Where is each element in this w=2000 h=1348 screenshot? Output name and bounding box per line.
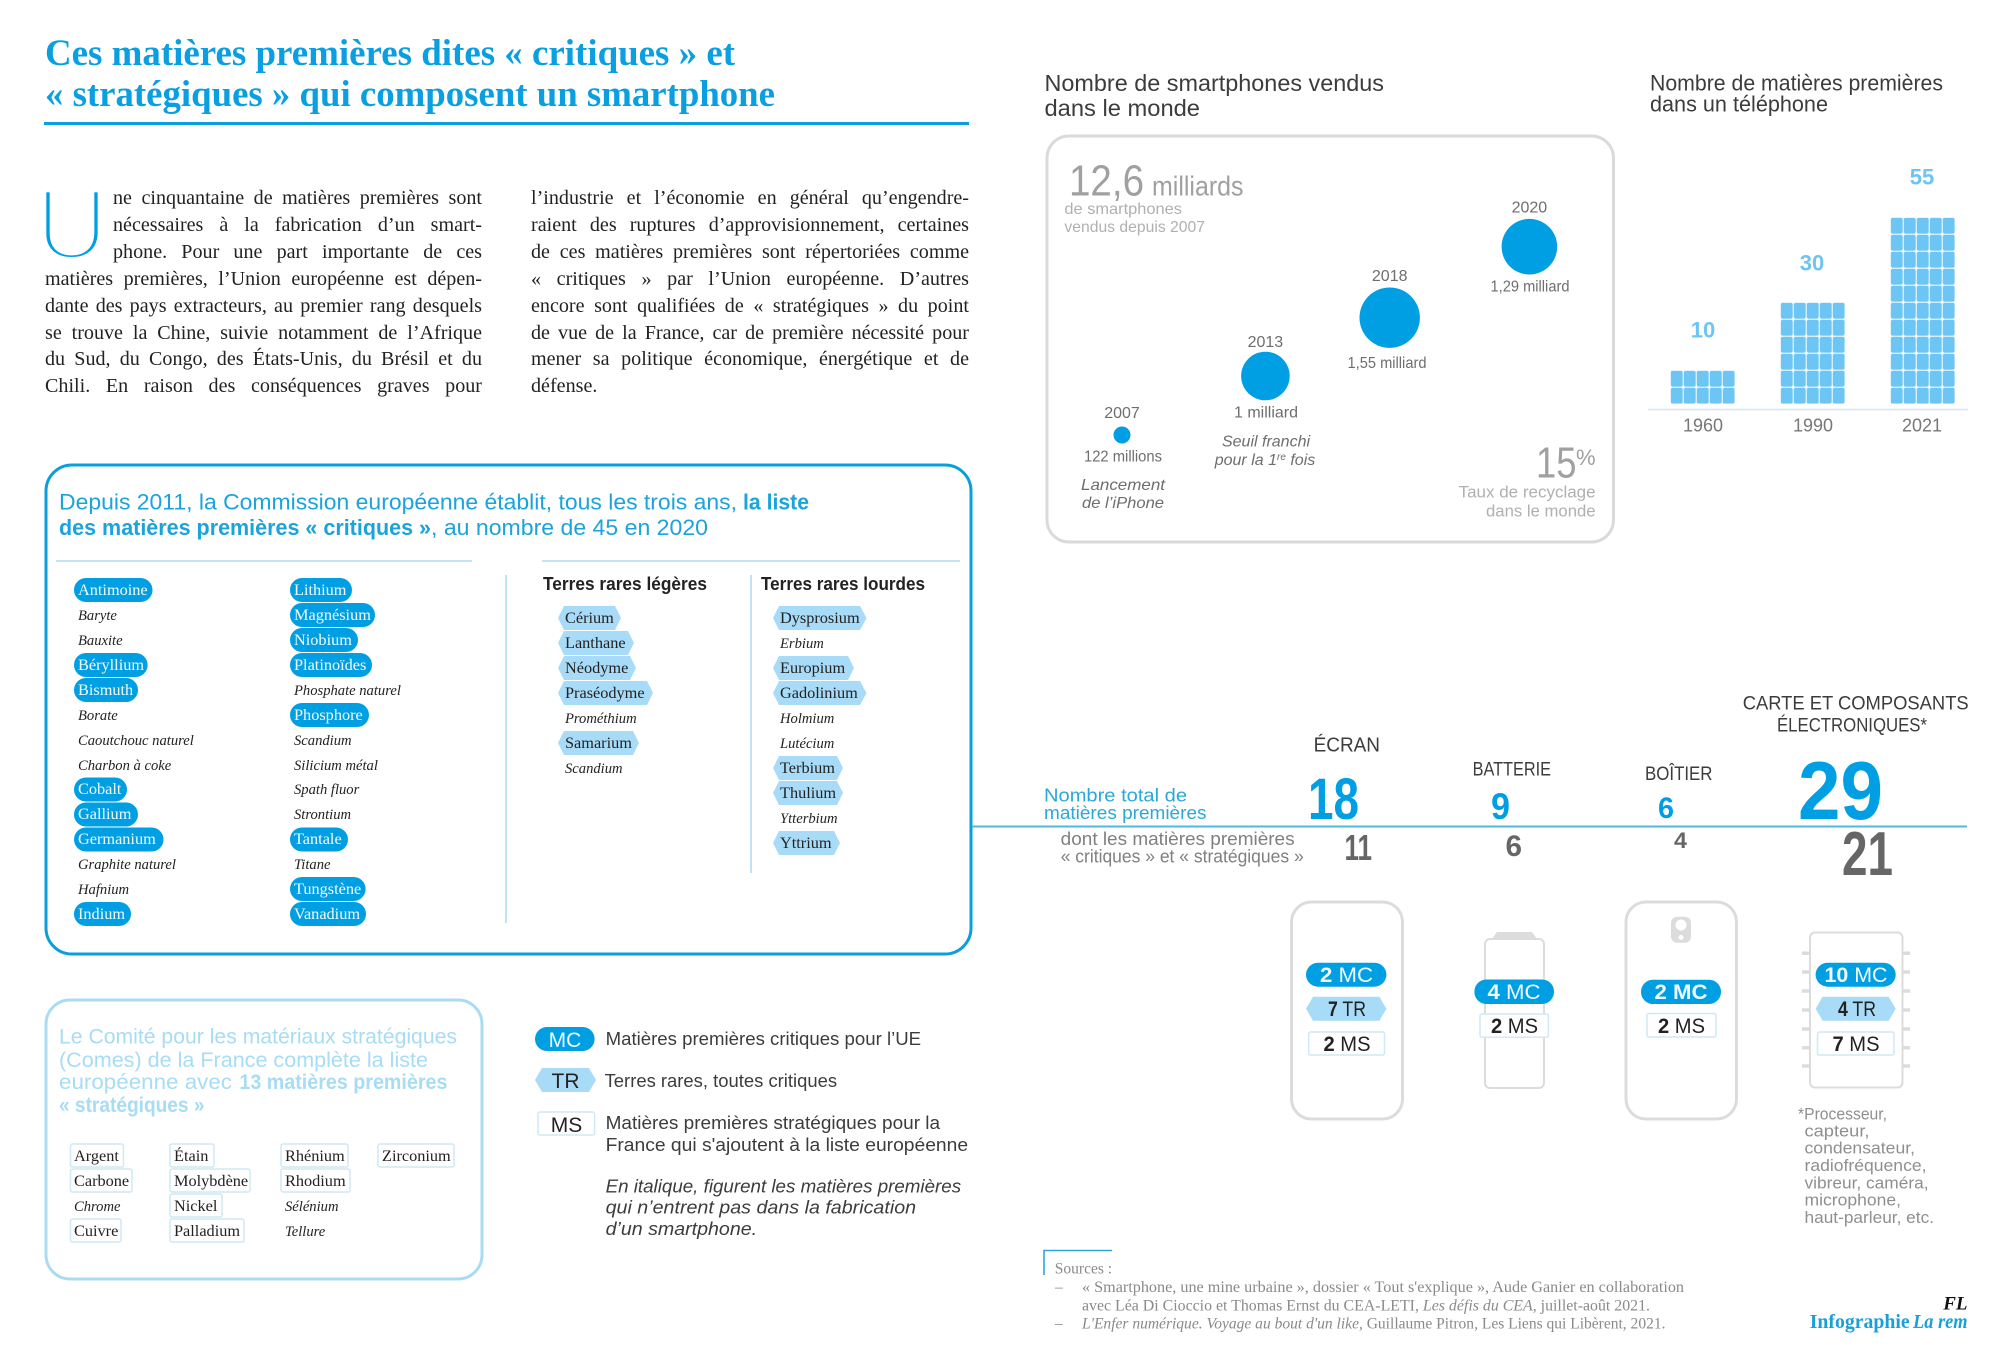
bubble 2013: 2013 — [1248, 334, 1283, 351]
legend: MC: MC — [549, 1029, 581, 1052]
credit: La rem — [1912, 1311, 1968, 1333]
bubble 2007: de l’iPhone — [1082, 495, 1164, 512]
panel heading: des matières premières « critiques » — [59, 515, 431, 540]
text block: intro column 2: encore sont qualifiées de « stratégiques » du point — [531, 295, 969, 317]
component: battery: 6 — [1506, 830, 1522, 863]
text block: intro column 2: raient des ruptures d’approvisionnement, certaines — [531, 214, 969, 236]
component: case — [1626, 763, 1736, 1119]
list column 1: Caoutchouc naturel — [78, 733, 194, 749]
strategic list: Tellure — [285, 1224, 326, 1240]
badge: 2 MC: 2 MC — [1320, 964, 1373, 987]
panel heading: Depuis 2011, la Commission européenne établit, tous les trois ans, — [59, 490, 737, 514]
bubble 2007: Lancement — [1081, 477, 1166, 494]
badge: 2 MS: 2 MS — [1658, 1015, 1705, 1038]
list column 2: Titane — [294, 857, 331, 873]
panel heading — [59, 490, 809, 540]
text block: intro column 2: de ces matières premières sont répertoriées comme — [531, 241, 969, 263]
list column 1: Borate — [78, 708, 118, 724]
legend: italics note: qui n’entrent pas dans la fabrication — [606, 1197, 916, 1218]
icon: camera — [1671, 917, 1691, 943]
heading: smartphones sold — [1044, 70, 1384, 121]
bubble 2013: Seuil franchi — [1222, 434, 1310, 451]
total sold: de smartphones — [1064, 201, 1182, 218]
light rare earths: Lanthane — [565, 633, 626, 652]
row labels: « critiques » et « stratégiques » — [1061, 846, 1304, 867]
text block: intro column 2: l’industrie et l’économie en général qu’engendre- — [531, 187, 969, 209]
sources: L'Enfer numérique. Voyage au bout d'un like, Guillaume Pitron, Les Liens qui Libèrent, 2021. — [1081, 1316, 1666, 1332]
bar 1990: 1990 — [1793, 416, 1833, 436]
strategic list: Nickel — [174, 1196, 218, 1215]
component: board and electronics: 29 — [1798, 744, 1883, 837]
heavy rare earths: Europium — [780, 658, 845, 677]
footnote: haut-parleur, etc. — [1804, 1209, 1934, 1227]
bubble 2007 — [1081, 405, 1166, 512]
list column 1: Bismuth — [78, 680, 133, 699]
legend — [535, 1027, 968, 1239]
row labels — [1044, 785, 1304, 867]
text block: intro column 1: ne cinquantaine de matières premières sont — [113, 187, 482, 209]
bar 1960: 1960 — [1683, 416, 1723, 436]
heavy rare earths — [761, 573, 925, 855]
list column 2: Niobium — [294, 630, 352, 649]
heading: raw materials per phone — [1650, 71, 1943, 117]
bubble 2013 — [1214, 334, 1315, 469]
footnote: vibreur, caméra, — [1804, 1174, 1928, 1192]
badge: 4 MC — [1474, 980, 1554, 1004]
strategic list: Rhodium — [285, 1171, 346, 1190]
panel heading — [59, 1026, 457, 1117]
bar 1990: 30 — [1800, 250, 1824, 276]
component: screen: 11 — [1344, 827, 1372, 868]
text block: intro column 2: défense. — [531, 374, 597, 396]
bubble 2007: 2007 — [1104, 405, 1140, 422]
recycling rate: Taux de recyclage — [1459, 483, 1596, 502]
panel: smartphones sold bubbles — [1047, 136, 1614, 542]
light rare earths: Praséodyme — [565, 683, 645, 702]
icon: phone back — [1626, 902, 1736, 1119]
text block: intro column 1: nécessaires à la fabrication d’un smart- — [113, 214, 482, 236]
component: case: BOÎTIER — [1645, 763, 1712, 785]
component: board and electronics: ÉLECTRONIQUES* — [1777, 714, 1927, 737]
light rare earths: Prométhium — [564, 711, 637, 727]
component: battery — [1473, 760, 1554, 1088]
text block: intro column 2: « critiques » par l’Union européenne. D’autres — [531, 268, 969, 290]
badge: 7 MS — [1818, 1032, 1894, 1056]
heavy rare earths: Terres rares lourdes — [761, 573, 925, 594]
badge: 4 TR — [1816, 997, 1896, 1021]
sources: – — [1054, 1279, 1063, 1296]
badge: 7 TR — [1306, 997, 1386, 1021]
bar 1960 — [1671, 318, 1735, 436]
footnote: capteur, — [1804, 1122, 1870, 1140]
panel: critical raw materials list — [46, 465, 971, 954]
light rare earths — [543, 573, 707, 777]
chart: raw materials per phone — [1648, 164, 1968, 436]
bar 2021: 55 — [1910, 164, 1934, 190]
strategic list: Argent — [74, 1146, 119, 1165]
heavy rare earths: Thulium — [780, 783, 836, 802]
sources: – — [1054, 1316, 1063, 1332]
icon: battery — [1485, 932, 1544, 1088]
strategic list: Cuivre — [74, 1221, 118, 1240]
bubble 2018: 1,55 milliard — [1348, 355, 1426, 372]
component: board and electronics — [1743, 692, 1969, 1227]
legend: MS: MS — [551, 1114, 582, 1137]
strategic list: Sélénium — [285, 1199, 338, 1215]
list column 1: Cobalt — [78, 779, 122, 798]
row labels: dont les matières premières — [1061, 828, 1295, 849]
sources: avec Léa Di Cioccio et Thomas Ernst du CEA-LETI, Les défis du CEA, juillet-août 2021. — [1082, 1298, 1650, 1314]
bar 2021: 2021 — [1902, 416, 1942, 436]
list column 1: Béryllium — [78, 655, 144, 674]
panel heading: « stratégiques » — [59, 1094, 204, 1117]
icon: phone front — [1292, 902, 1402, 1119]
bubble 2013: fois — [1286, 452, 1315, 469]
legend: TR — [535, 1068, 837, 1093]
panel: strategic raw materials — [46, 1000, 482, 1279]
recycling rate: dans le monde — [1486, 502, 1596, 520]
bubble 2020: 1,29 milliard — [1490, 279, 1570, 296]
list column 1: Bauxite — [78, 633, 123, 649]
row labels: Nombre total de — [1044, 785, 1187, 806]
icon: chip — [1802, 932, 1910, 1088]
sources: Sources : — [1055, 1260, 1112, 1278]
text block: intro column 1 — [45, 187, 482, 396]
list column 2: Lithium — [294, 580, 347, 599]
text block: intro column 1: dante des pays extracteurs, au premier rang desquels — [45, 295, 482, 317]
heading: raw materials per phone: Nombre de matières premières — [1650, 71, 1943, 96]
component: case: 4 — [1674, 828, 1688, 853]
list column 2: Spath fluor — [294, 782, 360, 798]
strategic list: Carbone — [74, 1171, 129, 1190]
text block: intro column 2: de vue de la France, car de première nécessité pour — [531, 322, 969, 344]
component: case: 6 — [1658, 792, 1674, 825]
list column 2: Tantale — [294, 829, 342, 848]
bar 2021 — [1891, 164, 1955, 436]
list column 2: Magnésium — [294, 605, 371, 624]
list column 1 — [74, 578, 194, 926]
list column 1: Hafnium — [77, 882, 129, 898]
light rare earths: Scandium — [565, 761, 623, 777]
legend: italics note — [606, 1176, 961, 1239]
legend: TR: Terres rares, toutes critiques — [605, 1070, 837, 1091]
recycling rate — [1459, 439, 1596, 520]
legend: MC — [535, 1027, 921, 1052]
bar 1990 — [1781, 250, 1845, 436]
bubble 2018 — [1348, 268, 1426, 372]
list column 2: Scandium — [294, 733, 352, 749]
list column 1: Charbon à coke — [78, 758, 172, 774]
total sold: milliards — [1152, 171, 1244, 202]
list column 1: Indium — [78, 904, 125, 923]
heavy rare earths: Terbium — [780, 758, 835, 777]
heavy rare earths: Yttrium — [780, 833, 832, 852]
recycling rate: 15 — [1536, 439, 1576, 488]
recycling rate: % — [1576, 445, 1596, 470]
bubble 2018: 2018 — [1372, 268, 1408, 285]
component: screen: 18 — [1308, 767, 1359, 832]
list column 2: Phosphore — [294, 705, 363, 724]
list column 2: Platinoïdes — [294, 655, 366, 674]
badge: 4 TR: 4 TR — [1838, 998, 1876, 1021]
strategic list — [70, 1144, 454, 1242]
bubble 2020: 2020 — [1512, 200, 1547, 217]
strategic list: Étain — [174, 1146, 208, 1165]
list column 1: Gallium — [78, 804, 132, 823]
title: « stratégiques » qui composent un smartphone — [45, 74, 775, 115]
heavy rare earths: Holmium — [779, 711, 834, 727]
list column 1: Antimoine — [78, 580, 148, 599]
list column 2: Strontium — [294, 807, 351, 823]
badge: 7 MS: 7 MS — [1832, 1033, 1880, 1056]
row labels: matières premières — [1044, 802, 1206, 823]
footnote: *Processeur, — [1798, 1106, 1887, 1124]
divider line — [972, 826, 1967, 828]
badge: 4 MC: 4 MC — [1488, 981, 1540, 1004]
badge: 10 MC: 10 MC — [1824, 964, 1888, 987]
strategic list: Palladium — [174, 1221, 240, 1240]
footnote: condensateur, — [1804, 1140, 1915, 1158]
bubble 2007: 122 millions — [1084, 449, 1162, 466]
text block: intro column 2 — [531, 187, 969, 396]
heading: smartphones sold: Nombre de smartphones vendus — [1044, 70, 1384, 96]
text block: intro column 1: du Sud, du Congo, des États-Unis, du Brésil et du — [45, 348, 482, 370]
credit: FL — [1942, 1294, 1968, 1314]
legend: MS: France qui s'ajoutent à la liste européenne — [606, 1134, 968, 1155]
component: battery: BATTERIE — [1473, 760, 1551, 781]
heavy rare earths: Dysprosium — [780, 608, 860, 627]
legend: MC: Matières premières critiques pour l’UE — [606, 1028, 921, 1049]
credit: Infographie — [1810, 1311, 1910, 1333]
footnote: microphone, — [1804, 1192, 1901, 1210]
badge: 2 MS: 2 MS — [1491, 1015, 1538, 1038]
footnote — [1798, 1106, 1934, 1227]
title: Ces matières premières dites « critiques » et — [45, 33, 736, 74]
badge: 2 MS — [1480, 1014, 1548, 1038]
component: screen — [1292, 734, 1402, 1119]
text block: intro column 2: mener sa politique économique, énergétique et de — [531, 348, 969, 370]
strategic list: Rhénium — [285, 1146, 345, 1165]
list column 1: Germanium — [78, 829, 156, 848]
sources: « Smartphone, une mine urbaine », dossier « Tout s'explique », Aude Ganier en collaboration — [1082, 1279, 1684, 1296]
light rare earths: Cérium — [565, 608, 614, 627]
bubble 2020 — [1490, 200, 1570, 296]
text block: intro column 1: phone. Pour une part importante de ces — [113, 241, 482, 263]
text block: intro column 1: Chili. En raison des conséquences graves pour — [45, 374, 482, 396]
footnote: radiofréquence, — [1804, 1157, 1926, 1175]
bubble 2013: pour la 1 — [1215, 452, 1277, 469]
legend: MS: Matières premières stratégiques pour la — [606, 1112, 941, 1133]
component: board and electronics: CARTE ET COMPOSANTS — [1743, 692, 1969, 714]
component: battery: 9 — [1491, 786, 1510, 827]
bubble 2013: re — [1277, 452, 1286, 463]
panel heading: (Comes) de la France complète la liste — [59, 1049, 428, 1072]
panel heading: , au nombre de 45 en 2020 — [431, 515, 708, 540]
drop cap: U — [36, 169, 108, 281]
legend: MS — [538, 1112, 968, 1155]
panel heading: Le Comité pour les matériaux stratégiques — [59, 1026, 457, 1049]
strategic list: Chrome — [74, 1199, 121, 1215]
strategic list: Molybdène — [174, 1171, 248, 1190]
badge: 2 MC — [1641, 980, 1721, 1004]
badge: 2 MS: 2 MS — [1324, 1033, 1370, 1056]
light rare earths: Samarium — [565, 733, 632, 752]
list column 2 — [290, 578, 401, 926]
list column 2: Silicium métal — [294, 758, 378, 774]
strategic list: Zirconium — [382, 1146, 451, 1165]
list column 2: Phosphate naturel — [293, 683, 401, 699]
heading: raw materials per phone: dans un téléphone — [1650, 92, 1828, 117]
list column 2: Vanadium — [294, 904, 360, 923]
legend: italics note: En italique, figurent les matières premières — [606, 1176, 961, 1197]
light rare earths: Néodyme — [565, 658, 628, 677]
badge: 2 MS — [1647, 1014, 1716, 1038]
title — [44, 33, 969, 125]
badge: 2 MC: 2 MC — [1654, 981, 1708, 1004]
component: screen: ÉCRAN — [1314, 734, 1380, 757]
component: board and electronics: 21 — [1842, 820, 1893, 889]
panel heading: européenne avec — [59, 1071, 232, 1094]
heavy rare earths: Lutécium — [779, 736, 834, 752]
heading: smartphones sold: dans le monde — [1044, 95, 1200, 121]
list column 1: Graphite naturel — [78, 857, 176, 873]
bar 1960: 10 — [1691, 318, 1715, 342]
total sold: 12,6 — [1069, 157, 1144, 206]
heavy rare earths: Gadolinium — [780, 683, 858, 702]
list column 1: Baryte — [78, 608, 117, 624]
panel heading: la liste — [743, 490, 809, 514]
list column 2: Tungstène — [294, 879, 361, 898]
credit — [1810, 1294, 1968, 1333]
legend: italics note: d’un smartphone. — [606, 1218, 757, 1239]
badge: 7 TR: 7 TR — [1328, 998, 1366, 1021]
heavy rare earths: Ytterbium — [780, 811, 838, 827]
total sold: vendus depuis 2007 — [1064, 219, 1205, 236]
bubble 2013: 1 milliard — [1234, 405, 1298, 422]
heavy rare earths: Erbium — [779, 636, 824, 652]
panel heading: 13 matières premières — [239, 1071, 447, 1094]
sources — [1044, 1250, 1684, 1332]
legend: TR: TR — [552, 1070, 580, 1093]
badge: 2 MS — [1309, 1032, 1384, 1056]
text block: intro column 1: se trouve la Chine, suivie notamment de l’Afrique — [45, 322, 482, 344]
total sold — [1064, 157, 1244, 236]
light rare earths: Terres rares légères — [543, 573, 707, 594]
badge: 2 MC — [1306, 963, 1386, 987]
text block: intro column 1: matières premières, l’Union européenne est dépen- — [45, 268, 482, 290]
